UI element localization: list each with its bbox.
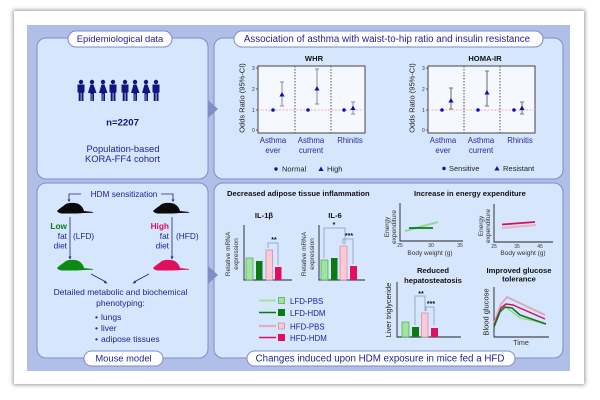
chart: WHR odds ratios: Odds Ratio (95%-CI)	[238, 63, 246, 133]
chart: energy expenditure HFD: Body weight (g)	[500, 250, 546, 257]
text: detailed phenotyping: Detailed metabolic and biochemical	[54, 287, 187, 297]
label: low fat diet	[50, 221, 94, 250]
heading: mouse model: Mouse model	[95, 353, 152, 364]
sample size: n=2207	[106, 118, 139, 128]
chart: WHR odds ratios: 1	[252, 108, 255, 114]
cohort description: KORA-FF4 cohort	[85, 153, 160, 164]
chart: HOMA-IR odds ratios: Sensitive	[449, 164, 479, 173]
subheading: glucose tolerance: tolerance	[502, 274, 536, 284]
label: low fat diet: (LFD)	[73, 231, 94, 241]
chart: IL-1β: Relative mRNA	[225, 231, 232, 276]
chart: blood glucose: Blood glucose	[482, 288, 490, 336]
subheading: inflammation: Decreased adipose tissue inflammation	[227, 189, 370, 198]
chart: HOMA-IR odds ratios: 3	[422, 66, 425, 72]
chart: IL-6	[301, 211, 365, 280]
legend: treatment groups: LFD-PBS	[290, 297, 323, 306]
icon: green mouse	[57, 260, 93, 270]
label: high fat diet: diet	[156, 240, 170, 250]
chart: HOMA-IR odds ratios: 1	[422, 108, 425, 114]
chart: energy expenditure LFD: 25	[397, 243, 403, 249]
label: high fat diet	[151, 221, 199, 250]
list: tissues: adipose tissues	[101, 334, 160, 344]
subheading: hepatosteatosis: Reduced	[417, 266, 449, 275]
subheading: hepatosteatosis: hepatosteatosis	[404, 276, 462, 285]
chart: energy expenditure HFD: Energy	[478, 215, 485, 236]
legend: treatment groups: LFD-HDM	[290, 309, 326, 318]
subheading: glucose tolerance: Improved glucose	[486, 266, 552, 275]
list: tissues: •	[95, 323, 98, 333]
panel: association of asthma	[214, 31, 563, 179]
chart: WHR odds ratios: Asthma	[298, 136, 324, 145]
chart: IL-6: Relative mRNA	[301, 231, 308, 276]
chart: energy expenditure LFD	[384, 203, 463, 257]
label: low fat diet: diet	[54, 240, 68, 250]
chart: energy expenditure LFD: 30	[428, 243, 434, 249]
chart: WHR odds ratios: Asthma	[260, 136, 286, 145]
chart: IL-6: expression	[309, 238, 316, 270]
chart: blood glucose	[482, 287, 549, 347]
chart: HOMA-IR odds ratios: ever	[435, 146, 451, 155]
heading: mouse model	[84, 351, 163, 366]
legend: treatment groups: HFD-HDM	[290, 334, 327, 343]
cohort description: Population-based	[87, 143, 159, 154]
panel: epidemiological data	[37, 31, 208, 179]
chart: WHR odds ratios: Normal	[282, 164, 307, 174]
panel: mouse model	[37, 183, 208, 366]
heading: changes induced	[247, 351, 515, 366]
arrow: mouse model to changes	[208, 266, 218, 284]
heading: epidemiological data	[68, 31, 172, 47]
label: low fat diet: fat	[58, 231, 68, 241]
chart: liver triglyceride: **	[418, 291, 424, 298]
chart: IL-1β: IL-1β	[255, 211, 273, 220]
text: detailed phenotyping: phenotyping:	[96, 298, 145, 308]
chart: WHR odds ratios	[238, 54, 365, 174]
chart: liver triglyceride: Liver triglyceride	[384, 283, 393, 337]
list: tissues: lungs	[101, 312, 121, 322]
chart: WHR odds ratios: 2	[252, 87, 255, 93]
heading: changes induced: Changes induced upon HDM exposure in mice fed a HFD	[256, 354, 504, 365]
chart: IL-6: IL-6	[328, 211, 342, 220]
chart: energy expenditure HFD	[478, 204, 553, 257]
chart: energy expenditure HFD: 25	[491, 244, 497, 250]
chart: IL-6: *	[333, 222, 336, 229]
list: tissues	[95, 312, 160, 344]
chart: WHR odds ratios: WHR	[305, 54, 324, 63]
chart: energy expenditure HFD: 45	[537, 244, 543, 250]
icon: pink mouse	[153, 260, 189, 270]
chart: IL-1β: expression	[233, 238, 240, 270]
list: tissues: •	[95, 312, 98, 322]
chart: liver triglyceride	[384, 282, 461, 337]
heading: association: Association of asthma with waist-to-hip ratio and insulin resistance	[244, 34, 530, 45]
chart: HOMA-IR odds ratios: Asthma	[468, 136, 494, 145]
chart: HOMA-IR odds ratios: 2	[422, 87, 425, 93]
label: HDM sensitization: HDM sensitization	[91, 189, 158, 199]
chart: HOMA-IR odds ratios	[408, 54, 535, 173]
legend: treatment groups	[259, 297, 327, 343]
chart: WHR odds ratios: 0	[252, 128, 255, 134]
chart: IL-1β: **	[271, 237, 277, 244]
chart: energy expenditure LFD: Body weight (g)	[407, 250, 453, 257]
chart: energy expenditure LFD: 35	[457, 243, 463, 249]
chart: HOMA-IR odds ratios: HOMA-IR	[468, 54, 502, 63]
subheading: energy expenditure: Increase in energy expenditure	[414, 189, 526, 198]
list: tissues: liver	[101, 323, 117, 333]
list: tissues: •	[95, 334, 98, 344]
icon: black mouse HFD	[153, 203, 189, 214]
label: high fat diet: fat	[160, 231, 170, 241]
chart: WHR odds ratios: ever	[265, 146, 281, 155]
chart: WHR odds ratios: Rhinitis	[337, 136, 363, 145]
chart: HOMA-IR odds ratios: Rhinitis	[507, 136, 533, 145]
chart: WHR odds ratios: 3	[252, 66, 255, 72]
chart: liver triglyceride: ***	[427, 301, 435, 308]
chart: energy expenditure LFD: expenditure	[391, 210, 398, 244]
chart: energy expenditure HFD: 35	[514, 244, 520, 250]
icon: row of people	[78, 80, 160, 101]
chart: WHR odds ratios: current	[299, 146, 324, 155]
chart: energy expenditure LFD: Energy	[384, 216, 391, 237]
chart: WHR odds ratios: High	[327, 164, 342, 174]
icon: black mouse LFD	[57, 203, 93, 214]
chart: HOMA-IR odds ratios: Asthma	[430, 136, 456, 145]
legend: treatment groups: HFD-PBS	[290, 322, 325, 332]
chart: energy expenditure HFD: expenditure	[485, 209, 492, 243]
heading: association	[234, 31, 543, 47]
label: high fat diet: (HFD)	[176, 231, 199, 241]
chart: HOMA-IR odds ratios: 0	[422, 128, 425, 134]
chart: IL-6: ***	[345, 233, 353, 240]
chart: HOMA-IR odds ratios: Odds Ratio (95%-CI)	[408, 63, 416, 133]
chart: HOMA-IR odds ratios: Resistant	[503, 164, 535, 173]
label: high fat diet: High	[151, 221, 169, 231]
arrow: epidemiology to association	[208, 100, 218, 118]
blue background panel	[27, 25, 570, 371]
arrows: sensitization to mice	[68, 194, 174, 284]
label: low fat diet: Low	[50, 221, 68, 231]
chart: HOMA-IR odds ratios: current	[469, 146, 494, 155]
panel: changes induced	[214, 183, 563, 366]
chart: blood glucose: Time	[513, 338, 529, 347]
chart: IL-1β	[225, 211, 292, 280]
heading: epidemiological data: Epidemiological data	[77, 33, 164, 44]
